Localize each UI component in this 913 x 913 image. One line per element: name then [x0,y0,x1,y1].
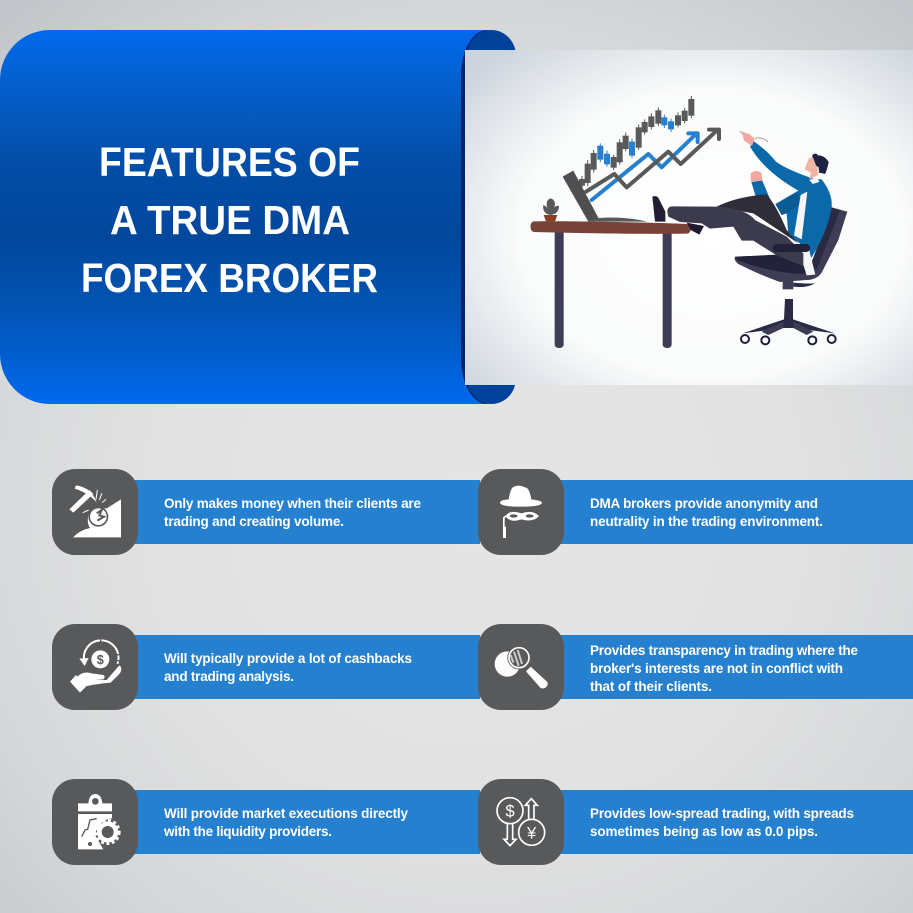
text: Provides low-spread trading, with spreads [590,806,854,821]
icon box: hat and mask [478,469,564,555]
text: Will provide market executions directly [164,806,408,821]
bar [556,480,913,544]
illustration panel [465,50,913,385]
feature row 3 left [52,779,480,865]
text: Only makes money when their clients are [164,496,421,511]
text: neutrality in the trading environment. [590,514,823,529]
desk [530,221,691,348]
feature row 2 left [52,624,480,710]
text: trading and creating volume. [164,514,344,529]
text: with the liquidity providers. [163,824,332,839]
plant [543,198,559,221]
bar [556,790,913,854]
icon box: dollar and yen exchange: $ [505,802,515,821]
bar [130,635,480,699]
title: FEATURES OF [99,139,360,185]
laptop [563,171,647,222]
icon box: dollar and yen exchange: ¥ [526,823,537,842]
text [164,651,412,684]
bar [130,480,480,544]
candlestick chart [579,96,694,188]
icon box: magnifier [478,624,564,710]
text [590,496,823,529]
banner blue panel [0,30,487,404]
title [81,139,378,301]
bar [130,790,480,854]
chair [735,207,847,344]
title: A TRUE DMA [110,197,350,243]
text: that of their clients. [590,679,712,694]
text: sometimes being as low as 0.0 pips. [590,824,818,839]
text [590,806,854,839]
bar [556,635,913,699]
icon box: cashback hand: $ [97,653,104,667]
icon box: pickaxe and coin [52,469,138,555]
man [652,131,832,275]
icon box: clipboard and gear [52,779,138,865]
banner tab: rolled edge [461,30,516,404]
text [163,806,408,839]
blue trend arrow [592,133,698,200]
header banner [0,30,516,404]
text: and trading analysis. [164,669,294,684]
feature row 1 left [52,469,480,555]
feature row 1 right [478,469,913,555]
feature row 3 right [478,779,913,865]
text: DMA brokers provide anonymity and [590,496,818,511]
feature row 2 right [478,624,913,710]
text: Provides transparency in trading where the [590,643,858,658]
icon box: cashback hand [52,624,138,710]
text: broker's interests are not in conflict with [590,661,843,676]
text [590,643,858,694]
text: Will typically provide a lot of cashbacks [164,651,412,666]
text [164,496,421,529]
title: FOREX BROKER [81,255,378,301]
icon box: dollar and yen exchange [478,779,564,865]
grey trend arrow [586,130,719,192]
illustration: trader with feet on desk [530,96,847,348]
